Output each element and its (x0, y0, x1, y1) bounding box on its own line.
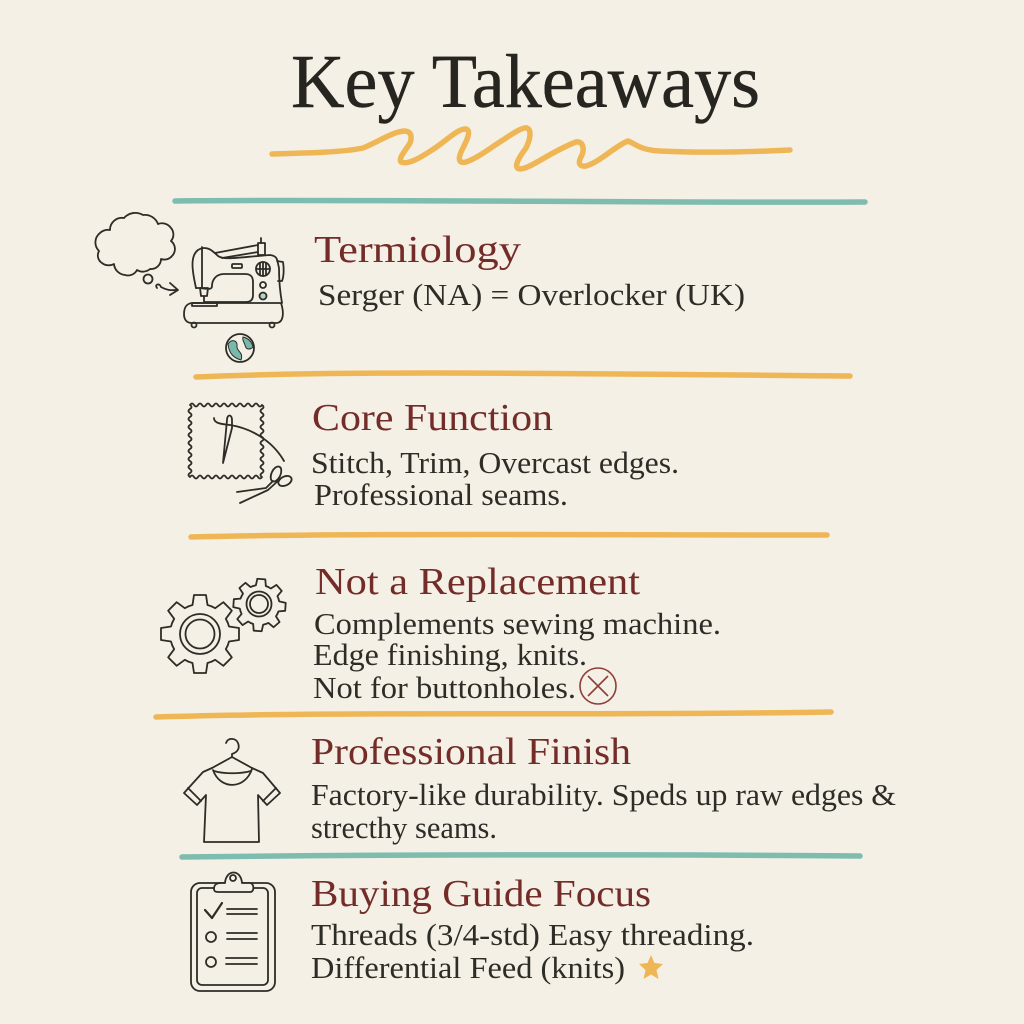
icon: sewing machine (184, 238, 284, 328)
heading: core function: Core Function (312, 397, 553, 439)
text: buying guide focus: Differential Feed (knits) (311, 950, 625, 985)
text: buying guide focus: Threads (3/4-std) Easy threading. (311, 917, 754, 952)
section: terminology (95, 213, 745, 362)
divider 2 (191, 534, 827, 537)
title underline squiggle (272, 128, 790, 169)
icon: x in circle (580, 668, 616, 704)
heading: buying guide focus: Buying Guide Focus (311, 873, 651, 915)
icon: globe (226, 334, 254, 362)
text: professional finish: Factory-like durability. Speds up raw edges & (311, 777, 896, 812)
divider top (175, 200, 865, 202)
heading: professional finish: Professional Finish (311, 731, 631, 773)
icon: t-shirt on hanger (184, 739, 280, 842)
text: not a replacement (313, 606, 721, 705)
icon: fabric swatch with needle (188, 404, 284, 478)
divider 4 (182, 855, 860, 857)
section: core function (188, 397, 679, 512)
heading: not a replacement: Not a Replacement (315, 561, 640, 603)
divider 1 (196, 373, 850, 377)
text: professional finish: strecthy seams. (311, 810, 497, 845)
icon: gears (161, 577, 287, 673)
text: core function (311, 445, 679, 512)
text: buying guide focus (311, 917, 754, 985)
text: terminology: Serger (NA) = Overlocker (UK) (318, 277, 745, 312)
icon: thought cloud (95, 213, 175, 275)
divider 3 (156, 712, 831, 717)
text: not a replacement: Complements sewing machine. (314, 606, 721, 641)
icon: clipboard checklist (191, 872, 275, 991)
icon: scissors (237, 465, 293, 503)
text: not a replacement: Edge finishing, knits. (313, 637, 587, 672)
heading: terminology: Termiology (314, 229, 521, 271)
icon: star (639, 955, 663, 979)
icon: thought arrow (144, 274, 178, 295)
text: not a replacement: Not for buttonholes. (313, 670, 576, 705)
text: core function: Professional seams. (314, 477, 568, 512)
section: not a replacement (161, 561, 721, 705)
title: Key Takeaways (291, 40, 760, 124)
text: professional finish (311, 777, 896, 845)
section: buying guide focus (191, 872, 754, 991)
text: core function: Stitch, Trim, Overcast edges. (311, 445, 679, 480)
section: professional finish (184, 731, 896, 845)
